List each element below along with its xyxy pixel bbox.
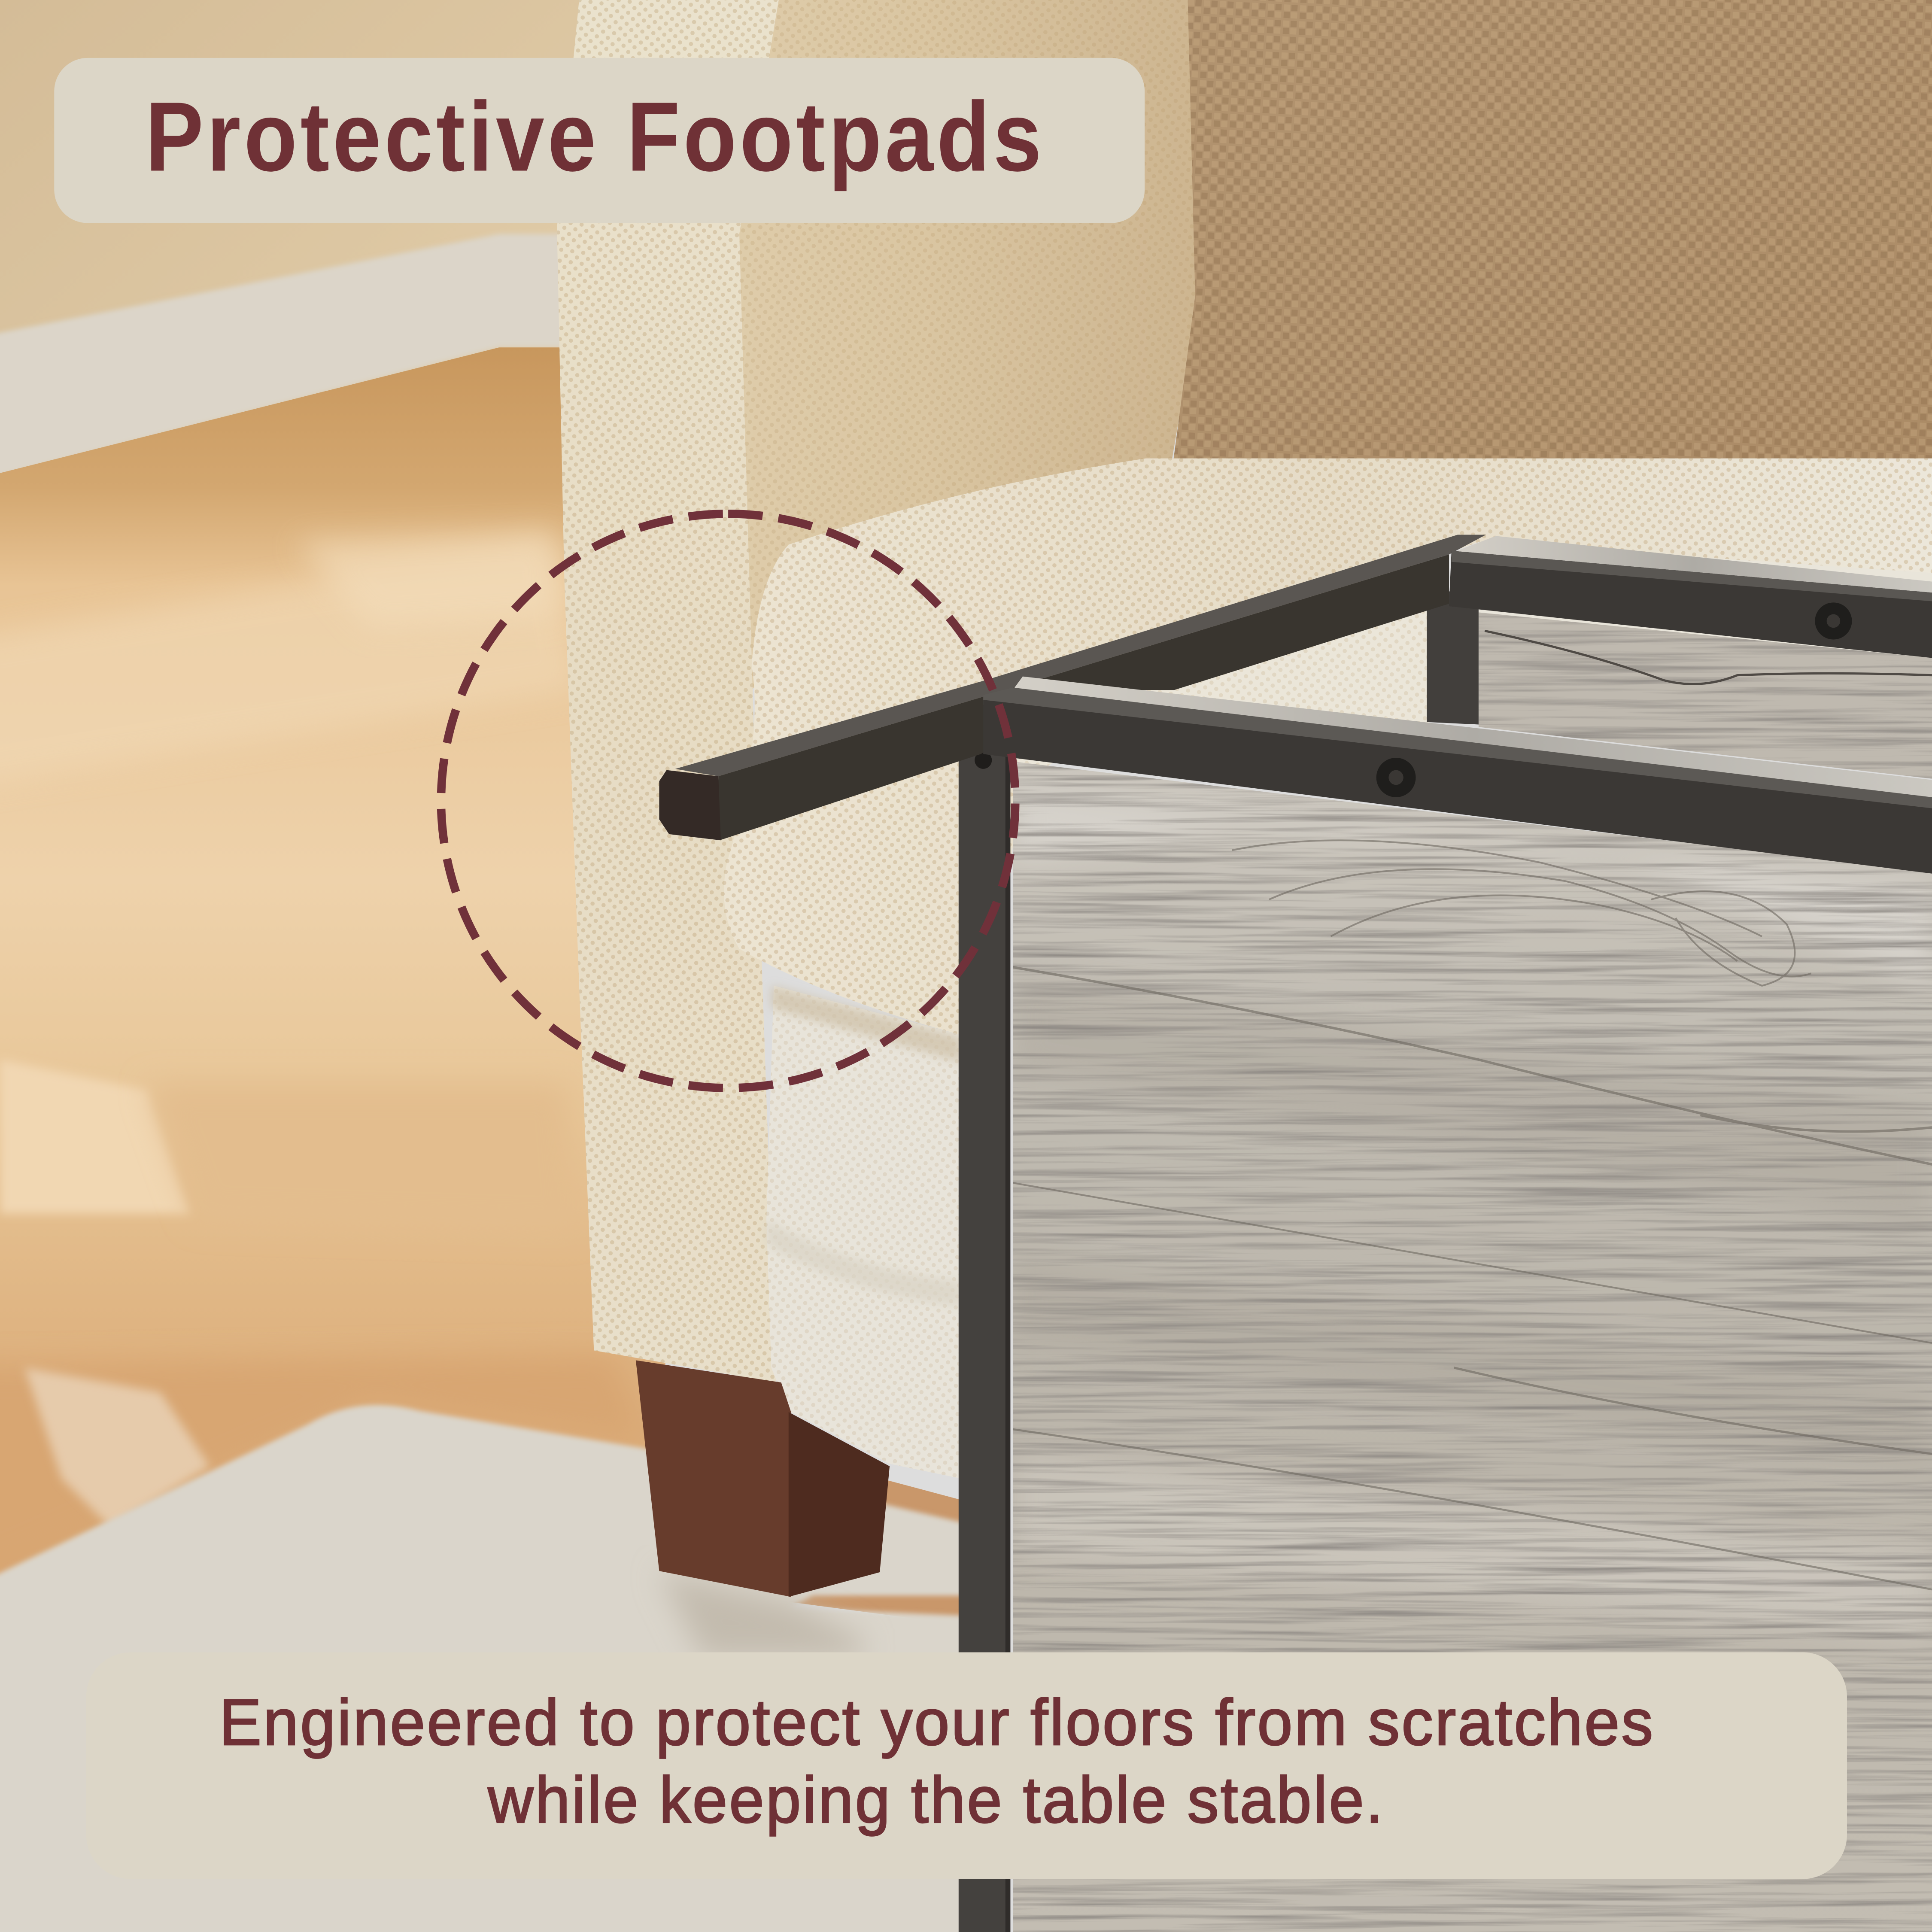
baseboard	[0, 234, 579, 486]
lower cushion front	[766, 986, 961, 1479]
room photo background	[0, 0, 986, 1932]
front wood panel	[1013, 762, 1932, 1932]
front rail	[983, 677, 1932, 874]
back post	[1427, 592, 1479, 725]
title text: Protective Footpads	[146, 81, 1045, 191]
caption text: Engineered to protect your floors from scratches	[219, 1686, 1655, 1759]
back wood panel	[1479, 612, 1932, 780]
title panel	[54, 58, 1145, 223]
caption panel	[86, 1653, 1847, 1879]
dashed highlight circle	[441, 514, 1015, 1088]
rug	[0, 1405, 986, 1932]
metal leg	[959, 752, 1010, 1932]
seat cushion	[724, 459, 1932, 1035]
armchair	[557, 0, 1932, 1597]
caption text: while keeping the table stable.	[488, 1764, 1385, 1837]
wall	[0, 0, 616, 517]
left side rail	[675, 535, 1486, 840]
pillow	[1173, 0, 1932, 463]
side table	[659, 535, 1932, 1932]
back rail	[1449, 536, 1932, 658]
caption text	[219, 1686, 1655, 1837]
wooden chair leg	[636, 1360, 890, 1597]
screw front	[1376, 758, 1416, 797]
chair back	[579, 0, 1198, 690]
wood floor	[0, 347, 973, 1750]
screw back	[1815, 602, 1852, 639]
chair arm front	[557, 0, 779, 1382]
rail end cap footpad	[659, 770, 721, 840]
